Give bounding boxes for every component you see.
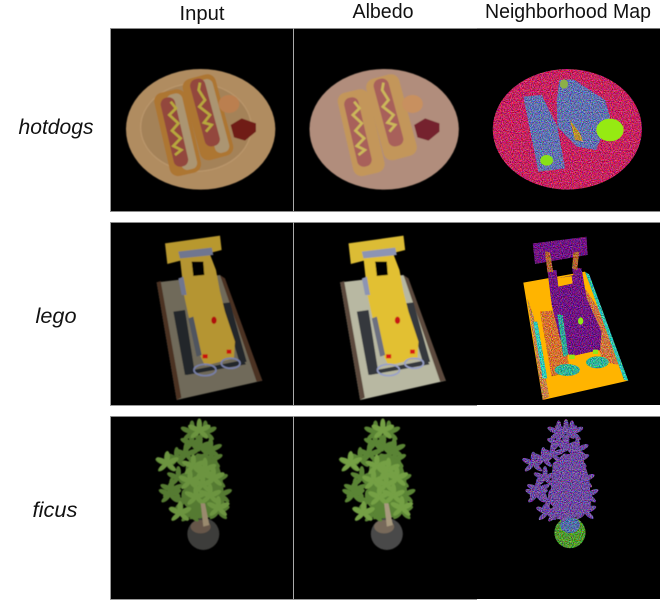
heading: Albedo: Albedo bbox=[352, 1, 414, 23]
panel: lego albedo bbox=[294, 222, 477, 405]
panel borders bbox=[110, 28, 660, 600]
panel: hotdogs input bbox=[110, 28, 294, 211]
row label: ficus: ficus bbox=[32, 499, 78, 522]
row label: hotdogs: hotdogs bbox=[18, 116, 94, 139]
panel: lego input bbox=[110, 222, 294, 405]
heading: Neighborhood Map: Neighborhood Map bbox=[485, 1, 651, 23]
row label: lego: lego bbox=[36, 305, 77, 328]
panel: hotdogs neighborhood map bbox=[477, 28, 660, 211]
heading: Input: Input bbox=[180, 3, 225, 25]
panel: ficus albedo bbox=[294, 416, 477, 599]
panel: ficus input bbox=[110, 416, 294, 599]
panel: hotdogs albedo bbox=[294, 28, 477, 211]
panel: lego neighborhood map bbox=[477, 222, 660, 405]
panel: ficus neighborhood map bbox=[477, 416, 660, 599]
